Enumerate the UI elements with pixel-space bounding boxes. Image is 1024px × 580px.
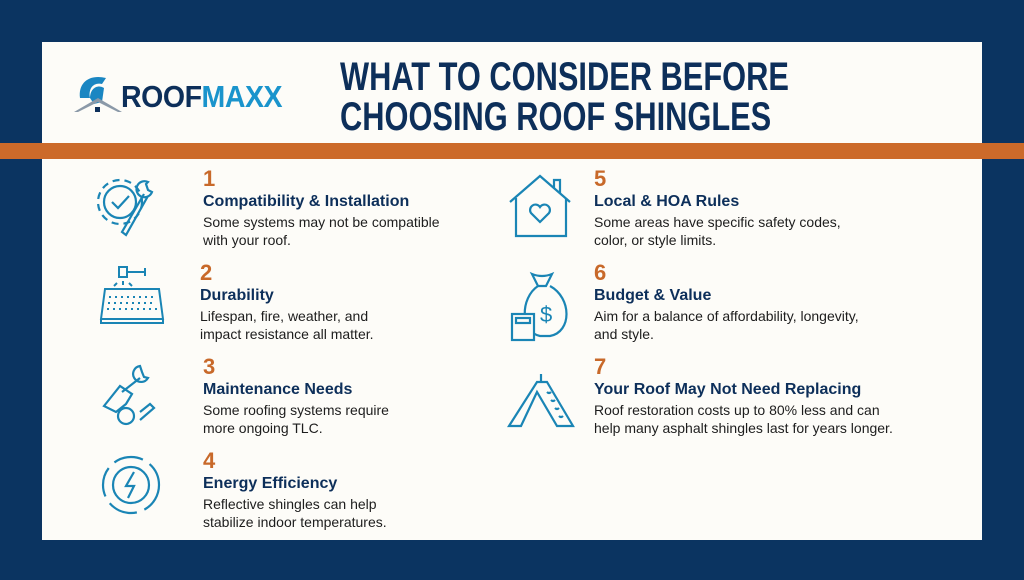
- item 7: [594, 354, 893, 436]
- item 2: Lifespan, fire, weather, and: [200, 308, 368, 324]
- item 6: and style.: [594, 326, 654, 342]
- item 3: 3: [203, 354, 215, 379]
- item 2: 2: [200, 260, 212, 285]
- item 4: stabilize indoor temperatures.: [203, 514, 387, 530]
- title: WHAT TO CONSIDER BEFORE: [340, 55, 789, 99]
- item 2: impact resistance all matter.: [200, 326, 374, 342]
- item 3: [203, 354, 389, 436]
- item 4: 4: [203, 448, 215, 473]
- item 4: Energy Efficiency: [203, 475, 337, 492]
- title: [340, 55, 789, 139]
- item 5: Some areas have specific safety codes,: [594, 214, 841, 230]
- item 1: with your roof.: [203, 232, 291, 248]
- item 5: [594, 166, 841, 248]
- item 4: Reflective shingles can help: [203, 496, 377, 512]
- item 7: 7: [594, 354, 606, 379]
- item 4: [203, 448, 387, 530]
- icon: money bag and calculator: $: [540, 302, 552, 327]
- item 1: Compatibility & Installation: [203, 193, 409, 210]
- icon: hammer on shingle: [100, 266, 164, 324]
- item 5: 5: [594, 166, 606, 191]
- item 5: color, or style limits.: [594, 232, 716, 248]
- icon: hand with wrench: [102, 364, 156, 426]
- item 1: Some systems may not be compatible: [203, 214, 440, 230]
- item 6: [594, 260, 859, 342]
- logo: ROOFMAXX: [121, 79, 282, 114]
- item 3: more ongoing TLC.: [203, 420, 323, 436]
- item 7: help many asphalt shingles last for years longer.: [594, 420, 893, 436]
- item 1: 1: [203, 166, 215, 191]
- icon: money bag and calculator: [510, 272, 568, 342]
- item 6: Budget & Value: [594, 287, 711, 304]
- item 5: Local & HOA Rules: [594, 193, 739, 210]
- icon: roof: [507, 374, 575, 428]
- item 3: Some roofing systems require: [203, 402, 389, 418]
- item 7: Roof restoration costs up to 80% less and can: [594, 402, 880, 418]
- icon: gear and wrench: [97, 178, 154, 237]
- item 3: Maintenance Needs: [203, 381, 352, 398]
- item 2: [200, 260, 374, 342]
- item 1: [203, 166, 440, 248]
- item 7: Your Roof May Not Need Replacing: [594, 381, 861, 398]
- icon: house with heart: [509, 174, 571, 238]
- icon: energy cycle: [102, 456, 160, 514]
- panel: main white card: [42, 42, 982, 540]
- item 6: Aim for a balance of affordability, longevity,: [594, 308, 859, 324]
- item 2: Durability: [200, 287, 274, 304]
- item 6: 6: [594, 260, 606, 285]
- title: CHOOSING ROOF SHINGLES: [340, 95, 771, 139]
- orange divider band: [0, 143, 1024, 159]
